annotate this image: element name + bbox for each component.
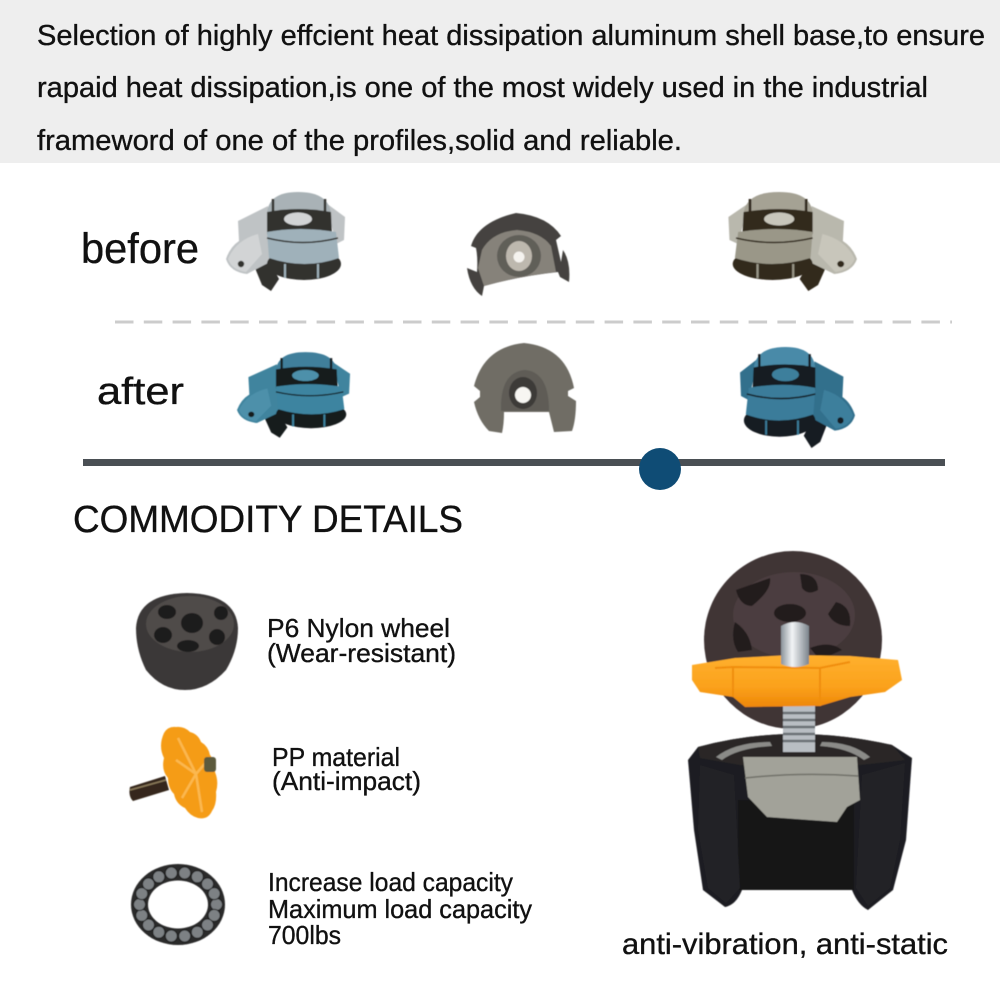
caption: anti-vibration: anti-vibration, anti-static: [622, 928, 948, 961]
icon: ball bearing: [131, 864, 225, 945]
wheel hub: [733, 572, 855, 660]
part: after bracket left: [237, 352, 350, 438]
wheel: [704, 551, 882, 729]
text: PP material: PP material: [272, 742, 400, 772]
text: nylon wheel: P6 Nylon wheel: [267, 613, 450, 643]
orange knob: [692, 655, 902, 707]
illustration: assembled caster: [688, 551, 912, 910]
banner: heat dissipation description: [0, 0, 1000, 163]
banner: heat dissipation description: Selection of highly effcient heat dissipation aluminum shell base,to ensure: [37, 20, 985, 52]
heading: commodity details: COMMODITY DETAILS: [73, 499, 463, 541]
icon: PP knob with bolt: [129, 727, 217, 818]
threaded screw: [783, 706, 815, 752]
text: load capacity: 700lbs: [268, 920, 341, 950]
part: after bracket right: [740, 347, 855, 448]
divider: dashed line: [115, 320, 952, 324]
text: load capacity: Maximum load capacity: [268, 894, 532, 924]
metal block: [743, 757, 860, 822]
text: load capacity: Increase load capacity: [268, 867, 513, 897]
text: load capacity: [268, 867, 532, 950]
part: before bracket left: [226, 192, 345, 291]
icon: nylon wheel: [136, 593, 238, 690]
label: before: before: [81, 225, 199, 273]
part: before bracket right: [728, 192, 857, 291]
text: nylon wheel: [267, 613, 456, 668]
divider: timeline with dot: [83, 448, 945, 490]
part: after centre casting: [474, 343, 576, 433]
silver pin: [781, 622, 809, 667]
banner: heat dissipation description: frameword of one of the profiles,solid and reliable.: [37, 125, 682, 157]
label: after: after: [97, 371, 184, 413]
part: before centre casting: [467, 213, 569, 296]
text: PP material: (Anti-impact): [272, 766, 421, 796]
housing: [688, 734, 912, 910]
banner: heat dissipation description: rapaid heat dissipation,is one of the most widely used in the industrial: [37, 72, 928, 104]
text: PP material: [272, 742, 421, 796]
text: nylon wheel: (Wear-resistant): [267, 638, 456, 668]
